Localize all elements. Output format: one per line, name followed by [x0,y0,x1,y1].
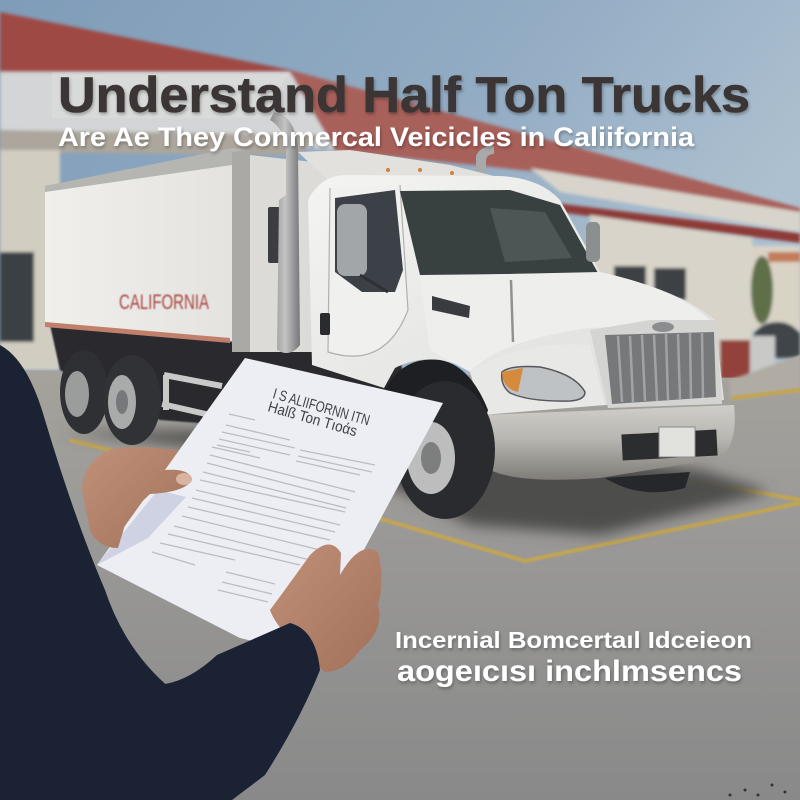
cargo box panel [250,155,340,352]
title: Understand Half Ton Trucks [58,67,750,123]
ground [0,355,800,800]
right red roof [290,70,800,225]
left red roof [0,12,300,78]
grille [590,320,722,408]
headlight [502,367,585,401]
cab lights [386,168,454,175]
red base [720,340,750,380]
air intake dark panel [268,207,281,263]
paper sheet [97,358,443,650]
right windows [614,266,646,288]
roof fairing [298,150,510,182]
right wall [590,215,752,385]
front wheel [383,359,495,519]
hand: left hand behind paper [82,447,190,548]
cargo chassis [50,325,420,440]
front lower body [470,344,605,415]
parking lines [70,390,800,561]
bumper vent [621,430,718,460]
windshield [400,190,598,275]
left fascia [0,72,335,150]
mirror right [586,222,600,262]
hands [82,448,382,672]
cargo box rear post [232,150,250,352]
red stripe [45,322,230,343]
paper body lines [152,414,375,602]
subtitle: Are Ae They Conmercal Veicicles in Caliifornia [58,122,695,152]
hood [420,272,712,372]
truck shadow [60,430,770,535]
hood vent [432,296,470,318]
door window [335,190,403,292]
rear exhaust tip [476,146,494,178]
far building [752,246,800,330]
person forearm sleeve [165,623,320,800]
door panel [328,185,408,356]
left soffit [0,130,320,155]
right hand [270,544,382,672]
paper heading: I S ALIIFORNN ITN [271,386,372,429]
left window [0,252,34,342]
caption line one: Incernial Bomcertaıl Idceieon [395,627,752,653]
rear wheels [60,350,222,445]
title highlight band [52,72,290,118]
mirror left [337,204,367,276]
sky [0,0,800,400]
under front [605,472,690,492]
truck [45,112,735,519]
left hand thumb and fingers [82,448,192,548]
tree [751,256,773,324]
left wall [0,150,60,370]
bin [750,336,775,376]
exhaust stack [270,112,300,353]
caption line two: aogeıcısı inchlmsencs [397,655,742,688]
bottom caption [395,627,752,688]
corner specks [728,784,786,796]
far car [752,322,800,358]
right trim [555,203,800,243]
bumper [480,405,735,480]
license plate [659,427,695,457]
person torso [0,345,215,800]
background building [0,12,800,385]
door handle [320,313,330,335]
right fascia [530,168,800,232]
document [97,358,443,650]
cab body [308,175,724,410]
box label: CALIFORNIA [119,291,209,314]
logo [652,322,674,332]
cargo box side [45,154,232,341]
left thumbnail [176,473,192,485]
document: Halß Ton Tıoάs [266,399,359,440]
